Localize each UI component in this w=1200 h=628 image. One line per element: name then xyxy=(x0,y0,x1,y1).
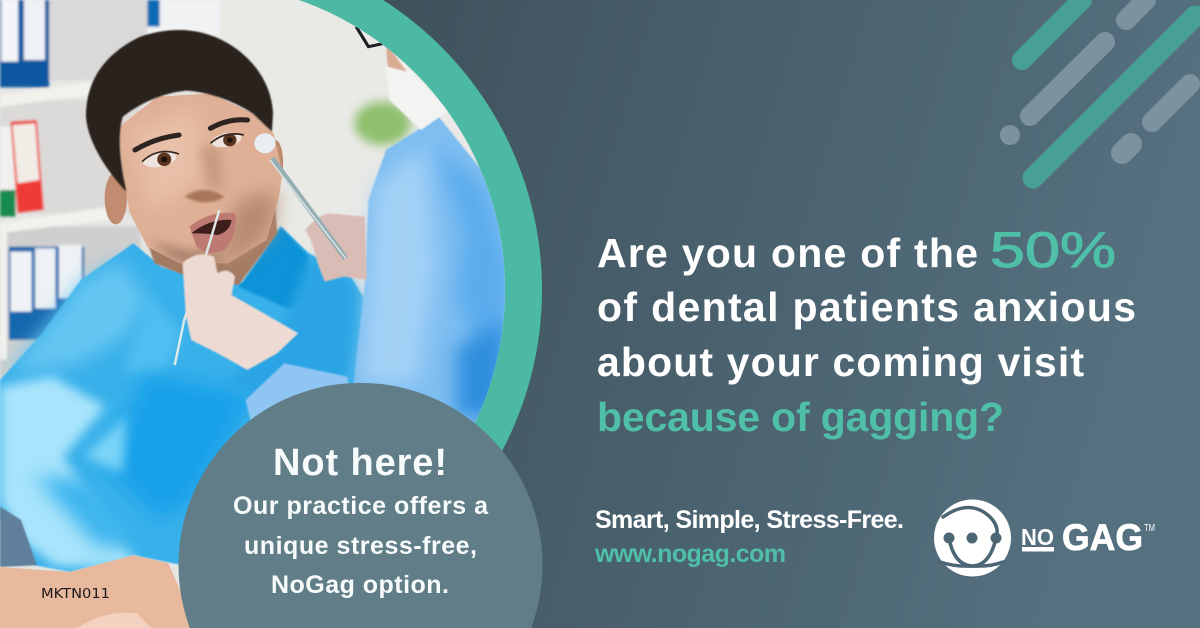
callout body text: Our practice offers a xyxy=(233,492,489,520)
patient's ears xyxy=(105,140,283,224)
tagline: Smart, Simple, Stress-Free. xyxy=(595,506,904,534)
decorative diagonal stripes xyxy=(1000,0,1195,178)
dental mirror xyxy=(254,133,346,258)
callout body text: NoGag option. xyxy=(271,571,449,599)
office background with shelves xyxy=(0,0,505,400)
patient's open mouth xyxy=(189,213,236,253)
patient's neck xyxy=(148,208,278,286)
main headline: Are you one of the xyxy=(597,230,978,276)
highlighted headline line: because of gagging? xyxy=(597,394,1004,440)
main headline: about your coming visit xyxy=(597,339,1084,385)
document code: MKTN011 xyxy=(41,587,110,602)
callout heading: Not here! xyxy=(273,442,447,484)
main headline xyxy=(597,222,1136,440)
icon: smiling face logo mark xyxy=(934,500,1011,576)
doctor's upper gloved hand xyxy=(305,213,367,282)
doctor's lower gloved hand xyxy=(182,254,298,370)
checked shirt and patient's hands xyxy=(0,507,197,628)
main headline: of dental patients anxious xyxy=(597,284,1136,330)
doctor's sleeve xyxy=(245,362,349,420)
callout body text xyxy=(233,492,489,599)
patient's face xyxy=(119,93,282,263)
dental probe xyxy=(175,210,219,365)
teal ring behind the photo xyxy=(0,0,542,628)
patient's hair xyxy=(86,30,273,192)
patient's eyes xyxy=(142,132,244,168)
highlighted statistic: 50% xyxy=(990,222,1116,278)
photo: nervous patient at the dentist xyxy=(0,0,505,628)
wordmark NO: NO xyxy=(1021,524,1054,550)
patient's gown xyxy=(0,227,365,572)
callout body text: unique stress-free, xyxy=(244,532,477,560)
doctor in blue scrubs xyxy=(351,27,526,433)
trademark: TM xyxy=(1144,523,1155,534)
grey-teal callout circle xyxy=(178,383,542,628)
patient's eyebrows xyxy=(135,120,247,150)
website: www.nogag.com xyxy=(594,540,786,568)
NoGag logo xyxy=(934,500,1155,576)
wordmark GAG: GAG xyxy=(1062,517,1143,558)
